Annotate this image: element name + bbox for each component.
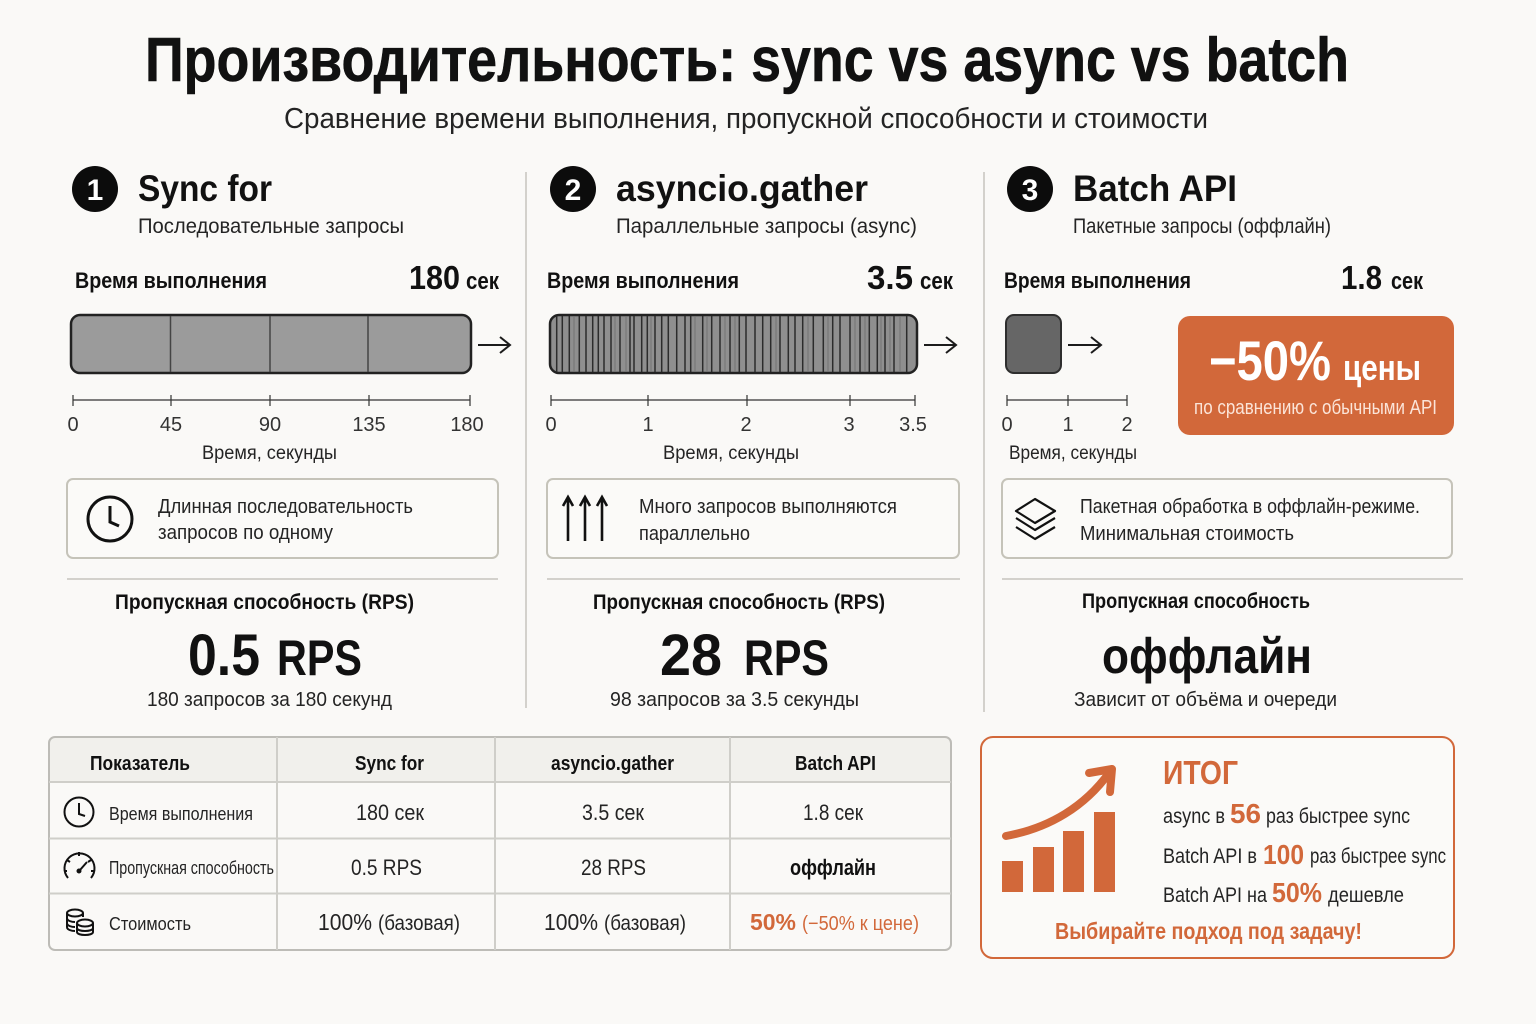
throughput value: 28	[660, 623, 722, 688]
time axis: 90	[259, 414, 281, 436]
subtitle: Сравнение времени выполнения, пропускной способности и стоимости	[284, 103, 1208, 135]
table header: Sync for	[355, 753, 424, 775]
row: throughput	[64, 852, 876, 880]
subheading: Параллельные запросы (async)	[616, 215, 917, 238]
icon: coins	[67, 910, 93, 935]
table header: Показатель	[90, 753, 190, 775]
callout text: Минимальная стоимость	[1080, 523, 1294, 545]
callout: -50% price: −50%	[1209, 329, 1331, 392]
row: throughput: Пропускная способность	[109, 858, 274, 878]
row: throughput: 28 RPS	[581, 855, 646, 880]
axis title: Время, секунды	[202, 443, 337, 464]
callout: parallel	[547, 479, 959, 558]
summary line 3	[1163, 877, 1404, 908]
time axis: 135	[352, 414, 386, 436]
value: 180 sec: сек	[466, 268, 500, 295]
badge 3: 3	[1022, 174, 1038, 207]
summary line 1: раз быстрее sync	[1266, 805, 1410, 828]
panel: summary	[981, 737, 1454, 958]
icon: clock	[88, 497, 132, 541]
summary line 2	[1163, 839, 1446, 870]
value: 1.8 sec	[1341, 259, 1424, 296]
badge 2	[550, 166, 596, 212]
badge 1	[72, 166, 118, 212]
throughput value: 0.5	[188, 623, 260, 688]
label: execution time: Время выполнения	[75, 268, 267, 293]
panel: Sync for	[67, 166, 510, 711]
throughput value: RPS	[277, 630, 362, 686]
throughput value: RPS	[744, 630, 829, 686]
throughput label: Пропускная способность	[1082, 590, 1310, 613]
summary line 3: 50%	[1272, 877, 1322, 908]
callout: -50% price: по сравнению с обычными API	[1194, 397, 1437, 419]
subheading: Пакетные запросы (оффлайн)	[1073, 215, 1331, 238]
axis title: Время, секунды	[1009, 443, 1137, 464]
panel: Batch API	[1001, 166, 1463, 711]
timeline bar: many parallel requests	[550, 315, 917, 373]
throughput note: 98 запросов за 3.5 секунды	[610, 689, 859, 711]
throughput note: Зависит от объёма и очереди	[1074, 689, 1337, 711]
summary line 1: async в	[1163, 805, 1225, 828]
row: cost: 100%	[318, 909, 372, 935]
throughput label: Пропускная способность (RPS)	[115, 591, 414, 614]
icon: clock	[64, 798, 94, 826]
time axis: 1	[1062, 414, 1074, 436]
badge 2: 2	[565, 174, 581, 207]
summary line 1	[1163, 798, 1410, 829]
callout text: Много запросов выполняются	[639, 496, 897, 518]
callout: -50% price: цены	[1343, 347, 1421, 388]
throughput note: 180 запросов за 180 секунд	[147, 689, 392, 711]
throughput value: оффлайн	[1102, 628, 1312, 684]
time axis: 3	[843, 414, 855, 436]
arrow	[1068, 337, 1101, 353]
axis title: Время, секунды	[663, 443, 799, 464]
callout text	[639, 496, 897, 545]
time axis: 45	[160, 414, 182, 436]
time axis: 2	[1121, 414, 1133, 436]
title: Производительность: sync vs async vs batch	[145, 26, 1349, 95]
callout text: запросов по одному	[158, 522, 333, 544]
time axis: 0	[1001, 414, 1013, 436]
callout text: Длинная последовательность	[158, 496, 413, 518]
row: cost: 50%	[750, 909, 796, 935]
arrow	[478, 337, 510, 353]
table header	[90, 753, 876, 775]
row: execution time: 3.5 сек	[582, 800, 644, 825]
icon: three up arrows	[563, 497, 607, 541]
icon: gauge	[64, 852, 94, 878]
callout: batch	[1002, 479, 1452, 558]
row: cost: 100%	[544, 909, 598, 935]
value: 3.5 sec: сек	[920, 268, 954, 295]
row: execution time: Время выполнения	[109, 804, 253, 824]
row: execution time: 180 сек	[356, 800, 424, 825]
heading: asyncio.gather: asyncio.gather	[616, 168, 868, 209]
table header: Batch API	[795, 753, 876, 775]
badge 1: 1	[87, 174, 103, 207]
time axis: 180	[450, 414, 484, 436]
comparison table	[49, 737, 951, 950]
label: execution time: Время выполнения	[547, 268, 739, 293]
callout: sequential	[67, 479, 498, 558]
subheading: Последовательные запросы	[138, 215, 404, 238]
timeline bar	[71, 315, 471, 373]
summary line 3: дешевле	[1328, 884, 1404, 907]
value: 180 sec: 180	[409, 259, 460, 296]
arrow	[924, 337, 956, 353]
row: execution time	[64, 798, 863, 826]
table header: asyncio.gather	[551, 753, 674, 775]
throughput value	[188, 623, 362, 688]
row: throughput: 0.5 RPS	[351, 855, 422, 880]
heading: Sync for: Sync for	[138, 168, 272, 209]
summary heading: ИТОГ	[1163, 754, 1238, 791]
heading: Batch API: Batch API	[1073, 168, 1237, 209]
callout text: Пакетная обработка в оффлайн-режиме.	[1080, 496, 1420, 518]
value: 3.5 sec	[867, 259, 954, 296]
row: cost: (−50% к цене)	[802, 913, 919, 935]
row: throughput: оффлайн	[790, 855, 876, 880]
value: 3.5 sec: 3.5	[867, 259, 913, 296]
icon: growth chart	[1002, 769, 1115, 892]
row: cost: (базовая)	[604, 912, 686, 935]
time axis	[67, 395, 484, 436]
value: 1.8 sec: сек	[1391, 268, 1424, 295]
panel: asyncio.gather	[545, 166, 960, 711]
throughput value	[660, 623, 829, 688]
summary line 2: Batch API в	[1163, 845, 1257, 868]
icon: layers	[1016, 499, 1055, 539]
row: cost: (базовая)	[378, 912, 460, 935]
label: execution time: Время выполнения	[1004, 268, 1191, 293]
summary line 2: раз быстрее sync	[1310, 845, 1446, 868]
summary line 3: Batch API на	[1163, 884, 1267, 907]
time axis: 3.5	[899, 414, 927, 436]
time axis: 1	[642, 414, 654, 436]
summary line 1: 56	[1230, 798, 1261, 829]
row: cost: Стоимость	[109, 914, 191, 934]
callout text	[158, 496, 413, 544]
time axis: 0	[545, 414, 557, 436]
time axis	[545, 395, 927, 436]
badge 3	[1007, 166, 1053, 212]
time axis: 2	[740, 414, 752, 436]
callout text	[1080, 496, 1420, 545]
throughput label: Пропускная способность (RPS)	[593, 591, 885, 614]
value: 1.8 sec: 1.8	[1341, 259, 1382, 296]
row: cost	[67, 909, 919, 935]
row: execution time: 1.8 сек	[803, 800, 863, 825]
summary call to action: Выбирайте подход под задачу!	[1055, 918, 1362, 944]
callout: -50% price	[1178, 316, 1454, 435]
summary line 2: 100	[1263, 839, 1304, 870]
timeline bar: short	[1006, 315, 1061, 373]
value: 180 sec	[409, 259, 500, 296]
time axis	[1001, 395, 1133, 436]
callout text: параллельно	[639, 523, 750, 545]
time axis: 0	[67, 414, 79, 436]
